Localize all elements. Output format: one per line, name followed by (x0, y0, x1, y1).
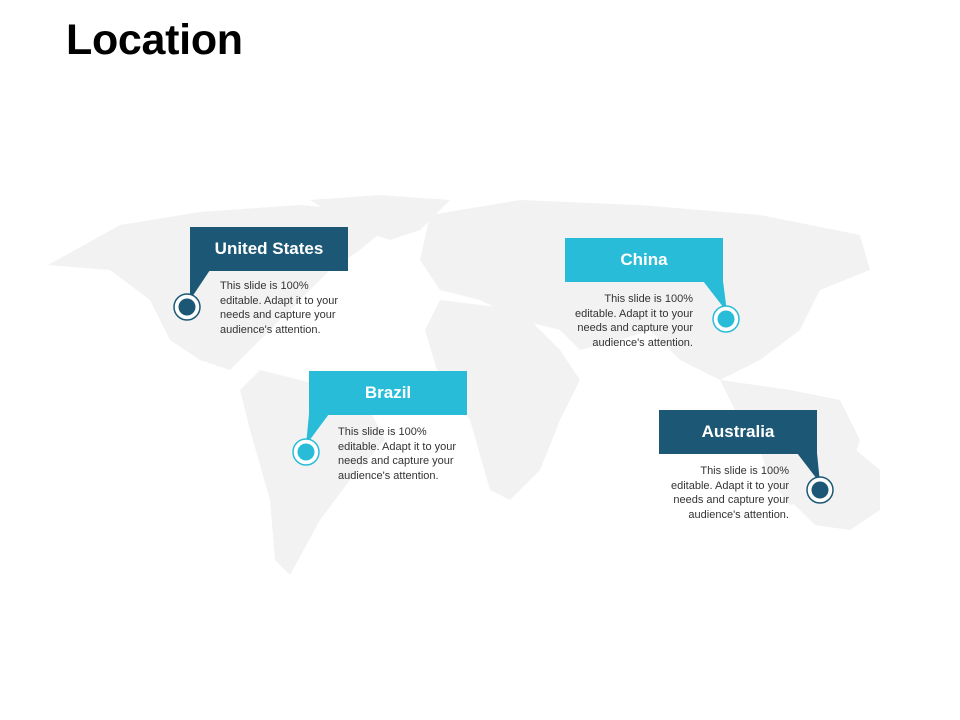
title: Location (66, 16, 243, 64)
callout: China: This slide is 100% editable. Adapt it to your needs and capture your audience's attention. (575, 293, 693, 348)
callout: China: China (620, 250, 668, 269)
callout: United States: United States (215, 239, 323, 258)
callout: Australia: This slide is 100% editable. Adapt it to your needs and capture your audience's attention. (671, 465, 789, 520)
callout: Australia: Australia (702, 422, 774, 441)
callout: Australia (659, 410, 817, 520)
callout: United States: This slide is 100% editable. Adapt it to your needs and capture your audience's attention. (220, 280, 338, 336)
callout: Brazil (309, 371, 467, 482)
callout: Brazil: This slide is 100% editable. Adapt it to your needs and capture your audience's attention. (338, 426, 456, 482)
callout: China (565, 238, 723, 348)
callout: Brazil: Brazil (365, 383, 411, 402)
